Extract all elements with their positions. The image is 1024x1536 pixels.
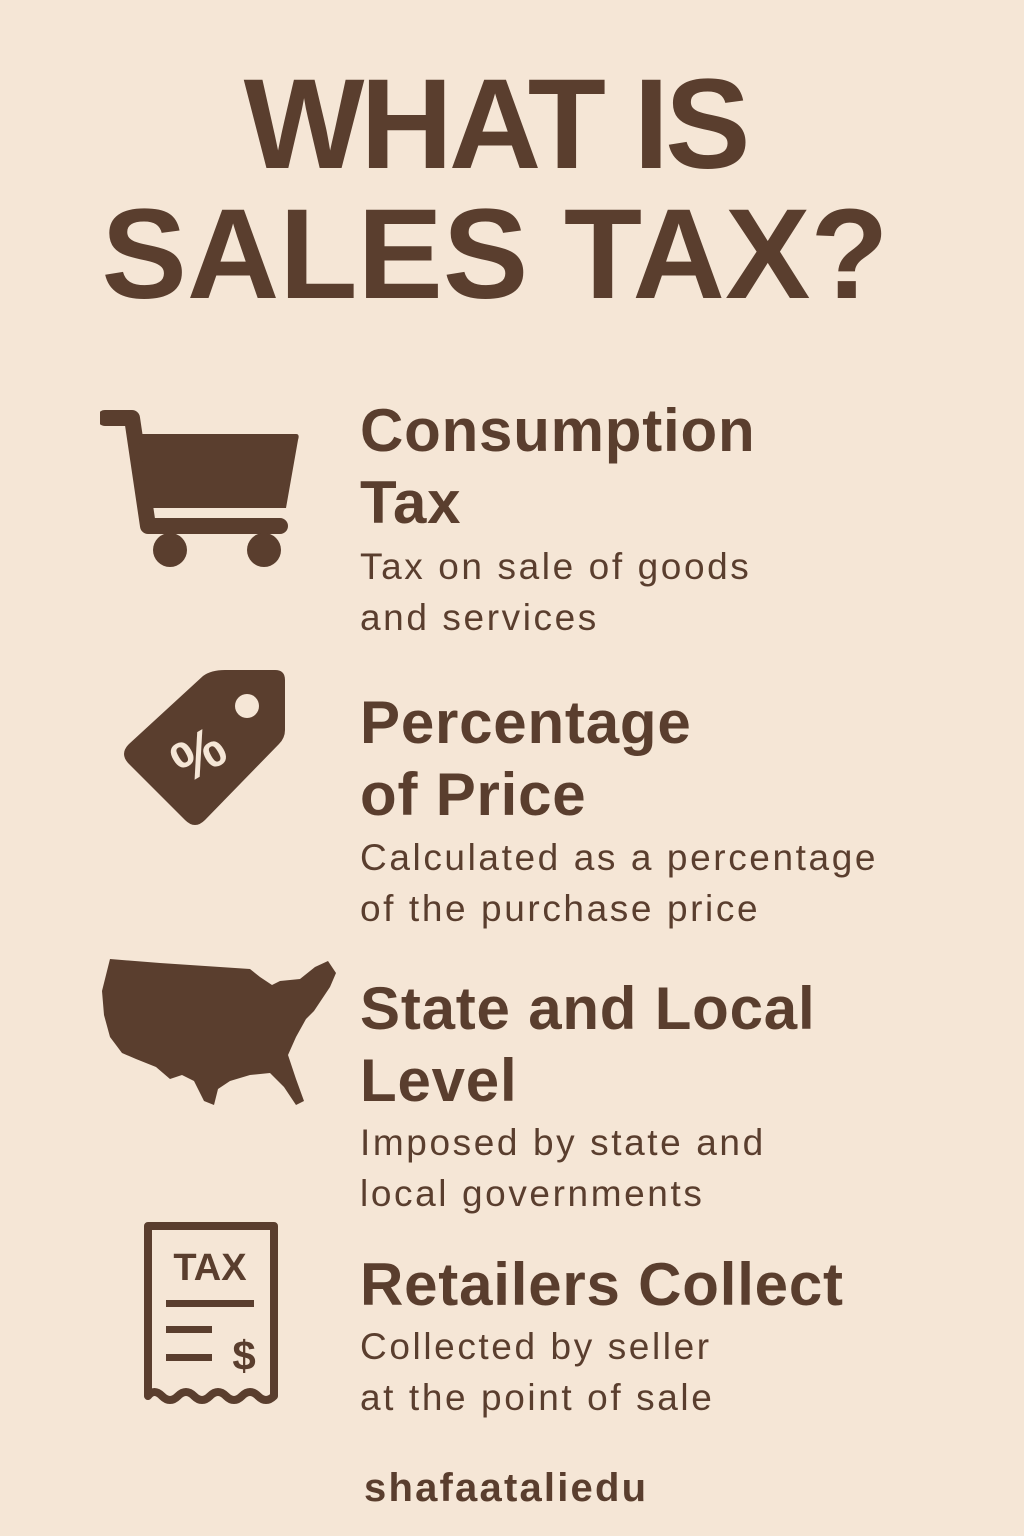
heading: state and local: State and Local bbox=[360, 975, 815, 1042]
text: state desc bbox=[360, 1122, 766, 1214]
heading: consumption tax: Consumption bbox=[360, 397, 755, 464]
text: retailers desc bbox=[360, 1326, 714, 1418]
heading: consumption tax: Tax bbox=[360, 469, 461, 536]
icon: tax receipt bbox=[144, 1222, 278, 1404]
icon: USA map bbox=[102, 959, 336, 1105]
heading: state and local bbox=[360, 975, 815, 1114]
heading: state and local: Level bbox=[360, 1047, 517, 1114]
heading: percentage bbox=[360, 689, 692, 828]
icon: price tag: % bbox=[160, 714, 237, 796]
icon: price tag bbox=[124, 670, 285, 825]
heading: retailers collect: Retailers Collect bbox=[360, 1251, 844, 1318]
icon: tax receipt: TAX bbox=[173, 1247, 247, 1289]
text: consumption desc: Tax on sale of goods bbox=[360, 546, 751, 587]
title bbox=[102, 53, 888, 326]
heading: percentage: of Price bbox=[360, 761, 586, 828]
text: retailers desc: Collected by seller bbox=[360, 1326, 712, 1367]
text: state desc: Imposed by state and bbox=[360, 1122, 766, 1163]
text: percentage desc bbox=[360, 837, 878, 929]
text: consumption desc: and services bbox=[360, 597, 599, 638]
text: percentage desc: of the purchase price bbox=[360, 888, 760, 929]
title: SALES TAX? bbox=[102, 183, 888, 326]
text: retailers desc: at the point of sale bbox=[360, 1377, 714, 1418]
footer credit: shafaataliedu bbox=[364, 1466, 648, 1510]
heading: consumption tax bbox=[360, 397, 755, 536]
text: percentage desc: Calculated as a percentage bbox=[360, 837, 878, 878]
icon: tax receipt: $ bbox=[232, 1332, 256, 1379]
icon: shopping cart bbox=[100, 410, 299, 567]
heading: percentage: Percentage bbox=[360, 689, 692, 756]
title: WHAT IS bbox=[244, 53, 746, 196]
text: consumption desc bbox=[360, 546, 751, 638]
text: state desc: local governments bbox=[360, 1173, 704, 1214]
